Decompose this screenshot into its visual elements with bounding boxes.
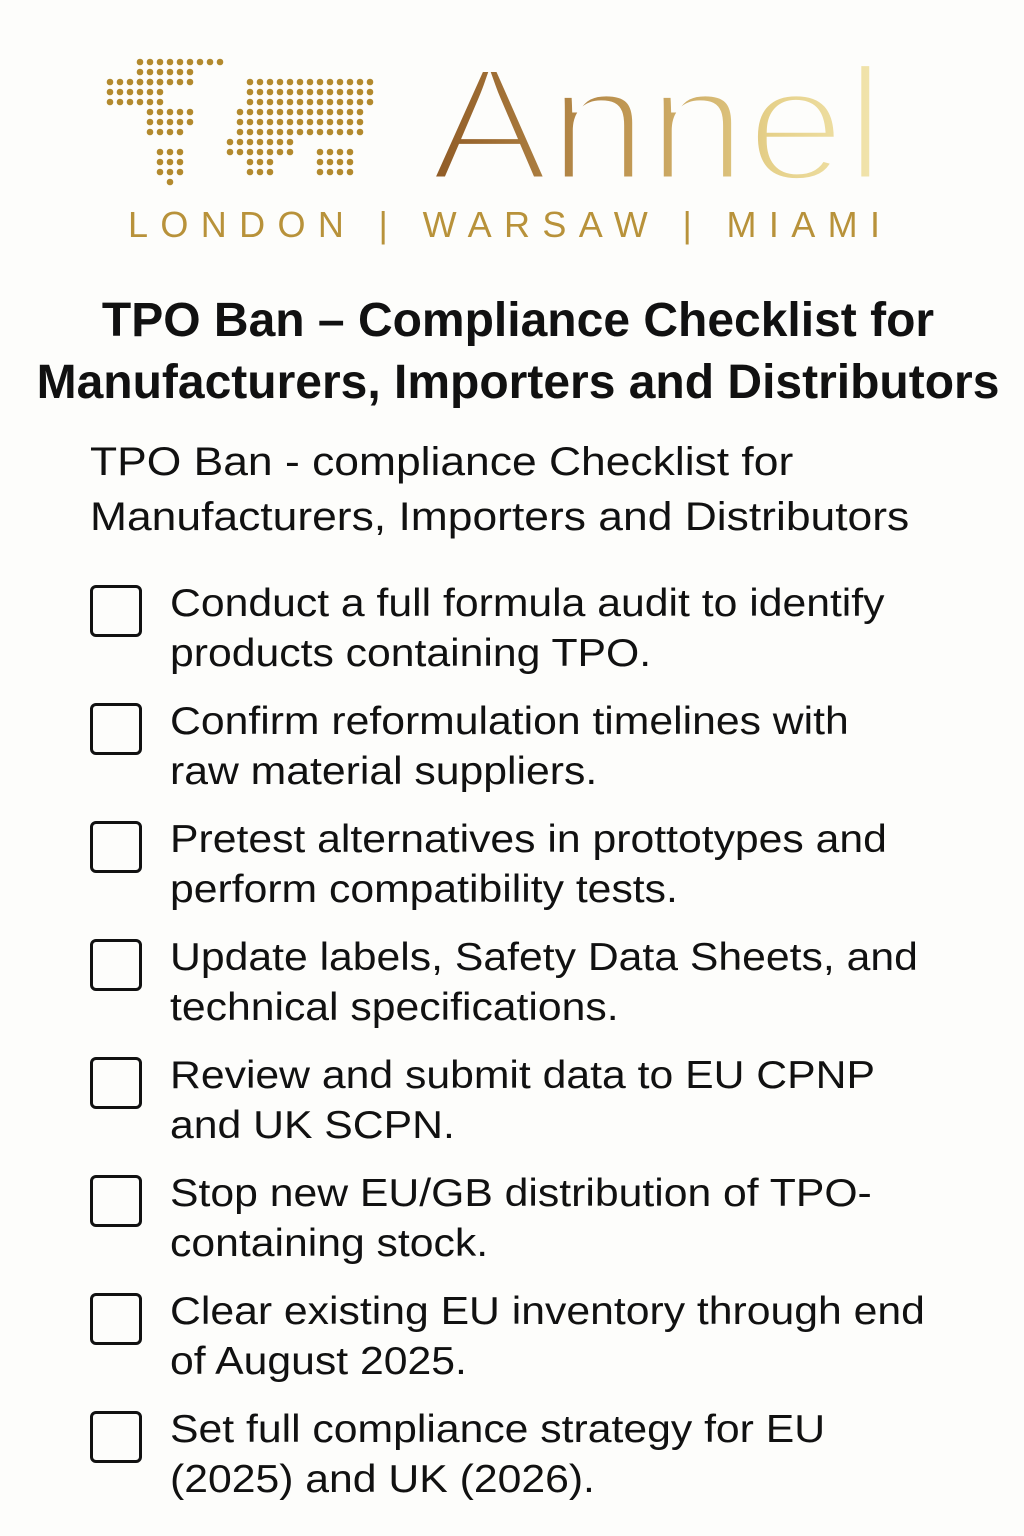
item 1: products containing TPO. [170, 632, 651, 675]
item 8 [90, 1408, 825, 1501]
item 3 [90, 818, 887, 911]
item 6 [90, 1172, 872, 1265]
item 3: perform compatibility tests. [170, 868, 678, 911]
item 4 [90, 936, 918, 1029]
title: Manufacturers, Importers and Distributors [37, 356, 999, 409]
item 1 [90, 582, 885, 675]
item 5 [90, 1054, 875, 1147]
title: TPO Ban – Compliance Checklist for [102, 294, 934, 347]
item 3: Pretest alternatives in prottotypes and [170, 818, 887, 861]
item 7: Clear existing EU inventory through end [170, 1290, 925, 1333]
subtitle: TPO Ban - compliance Checklist for [90, 440, 793, 484]
icon: dotted world map [105, 57, 375, 187]
item 5: Review and submit data to EU CPNP [170, 1054, 875, 1097]
item 2 [90, 700, 849, 793]
title [37, 294, 999, 409]
item 2: raw material suppliers. [170, 750, 597, 793]
item 4: Update labels, Safety Data Sheets, and [170, 936, 918, 979]
item 5: and UK SCPN. [170, 1104, 455, 1147]
logo cities: LONDON | WARSAW | MIAMI [128, 204, 880, 245]
item 7: of August 2025. [170, 1340, 467, 1383]
item 1: Conduct a full formula audit to identify [170, 582, 885, 625]
item 2: Confirm reformulation timelines with [170, 700, 849, 743]
item 8: (2025) and UK (2026). [170, 1458, 595, 1501]
item 7 [90, 1290, 925, 1383]
subtitle [90, 440, 909, 539]
item 4: technical specifications. [170, 986, 619, 1029]
logo [106, 50, 885, 245]
item 6: containing stock. [170, 1222, 488, 1265]
item 6: Stop new EU/GB distribution of TPO- [170, 1172, 872, 1215]
item 8: Set full compliance strategy for EU [170, 1408, 825, 1451]
subtitle: Manufacturers, Importers and Distributors [90, 495, 909, 539]
checklist [90, 582, 925, 1501]
